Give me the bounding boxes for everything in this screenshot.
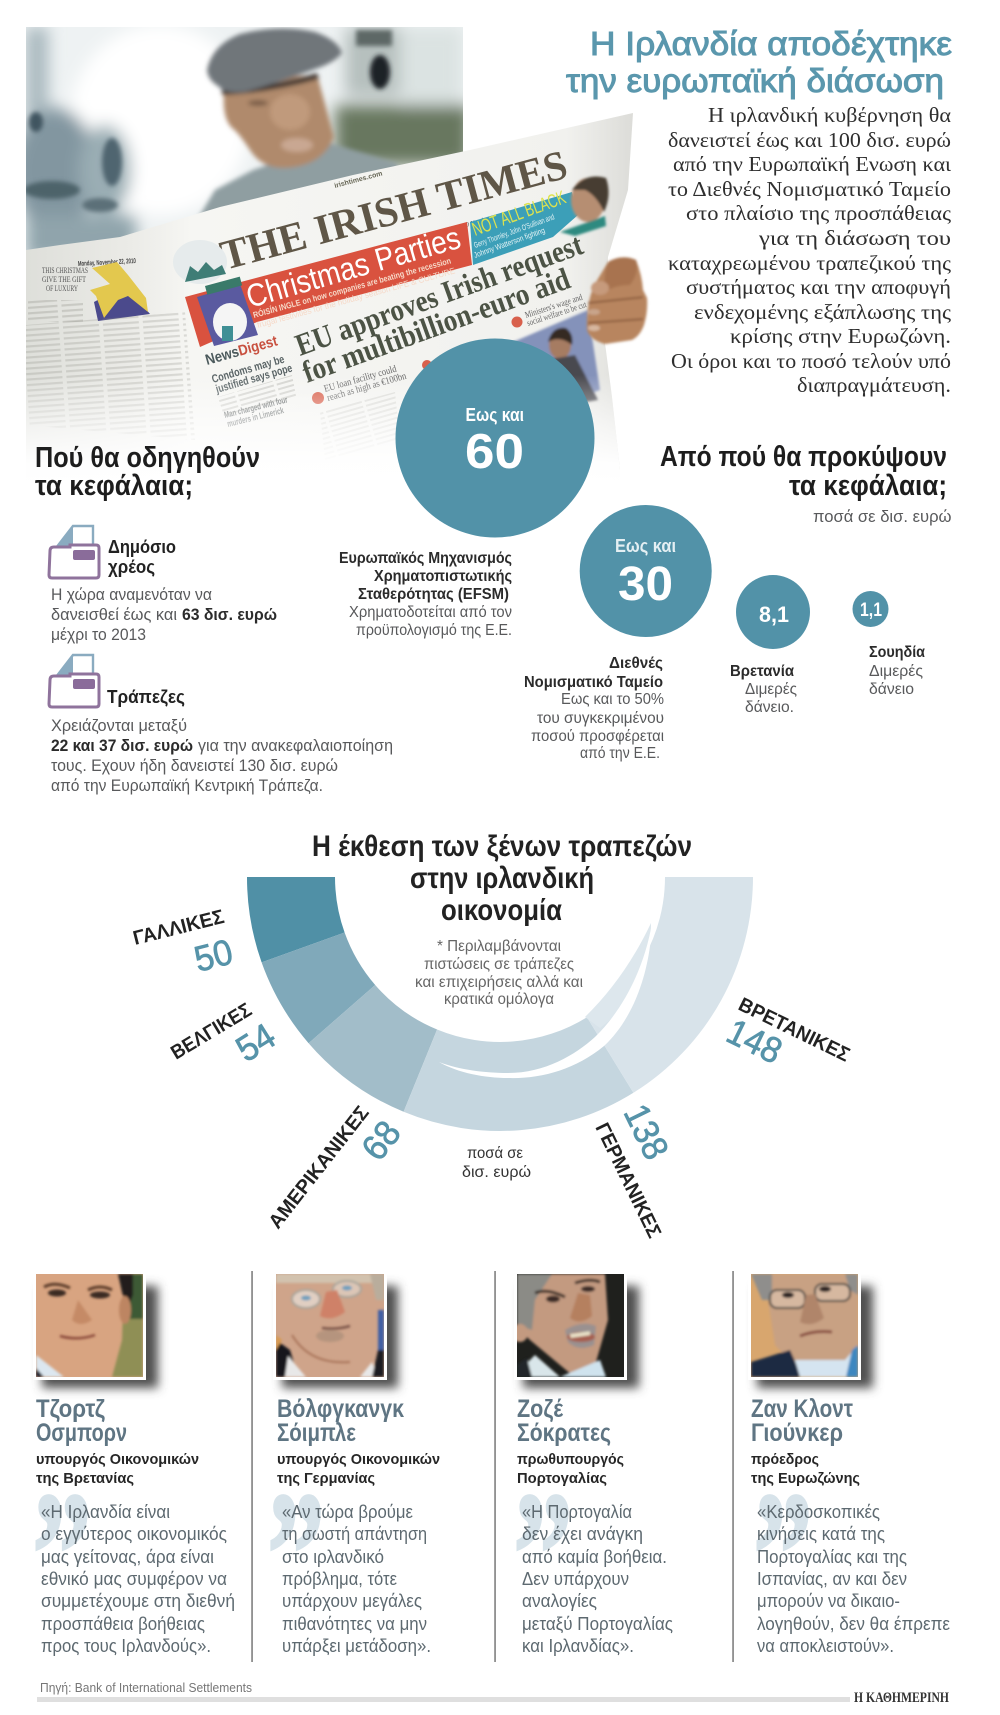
intro text block: το Διεθνές Νομισματικό Ταμείο	[668, 177, 951, 201]
newspaper lead bullets: social welfare to be cut	[526, 299, 588, 328]
newspaper red banner	[185, 219, 472, 347]
quote: Sócrates: Δεν υπάρχουν	[522, 1569, 629, 1589]
quote: Juncker: Ισπανίας, αν και δεν	[757, 1569, 907, 1589]
text: EFSM: Ευρωπαϊκός Μηχανισμός	[339, 550, 512, 567]
chart note: * Περιλαμβάνονται	[437, 938, 561, 955]
quote: Schäuble: τη σωστή απάντηση	[282, 1524, 427, 1544]
chart unit note: ποσά σε	[467, 1145, 523, 1162]
bubble: 8.1	[736, 575, 810, 649]
heading: where will the funds come from	[660, 441, 952, 526]
newspaper snow globe	[173, 240, 227, 284]
label: German banks: ΓΕΡΜΑΝΙΚΕΣ	[591, 1120, 665, 1242]
label: American banks: 68	[353, 1113, 409, 1168]
chart note	[415, 938, 583, 1008]
name: Sócrates: Σόκρατες	[517, 1419, 611, 1447]
newspaper news digest: murders in Limerick	[226, 405, 285, 429]
newspaper player photo	[560, 176, 609, 236]
role: Osborne	[36, 1451, 199, 1487]
text: Britain: δάνειο.	[745, 699, 794, 716]
newspaper news digest	[204, 333, 296, 429]
bubble: up to 60: 60	[465, 425, 524, 479]
quote: Osborne: μας γείτονας, άρα είναι	[41, 1547, 214, 1567]
segment: Belgian banks 54	[262, 932, 375, 1043]
newspaper: Monday, November 22, 2010 €1.80 (incl. VAT) £1.20 Northern Ireland	[334, 209, 515, 264]
text: IMF: Εως και το 50%	[561, 691, 664, 708]
quote: Osborne: προσπάθεια βοήθειας	[41, 1614, 205, 1634]
quote: Osborne	[41, 1502, 235, 1656]
icon: folder, banks	[49, 655, 99, 707]
intro text block: ενδεχομένης εξάπλωσης της	[694, 300, 952, 324]
newspaper lead bullets: EU loan facility could	[323, 364, 398, 395]
text: banks	[51, 687, 393, 795]
bubble: 1.1: 1,1	[860, 600, 882, 621]
chart note: κρατικά ομόλογα	[444, 991, 554, 1008]
name: Osborne: Οσμπορν	[36, 1419, 127, 1447]
white swoosh	[439, 923, 652, 1078]
quote: Juncker: «Κερδοσκοπικές	[757, 1502, 880, 1522]
newspaper	[26, 113, 633, 468]
portrait: Schäuble	[273, 1271, 398, 1388]
chart title: οικονομία	[441, 894, 562, 927]
quote: Sócrates: μεταξύ Πορτογαλίας	[522, 1614, 673, 1634]
quote: Juncker	[757, 1502, 950, 1656]
role: Schäuble: υπουργός Οικονομικών	[277, 1451, 440, 1468]
label: Belgian banks: 54	[229, 1015, 282, 1070]
quote: Juncker: λογηθούν, δεν θα έπρεπε	[757, 1614, 950, 1634]
text: banks: 22 και 37 δισ. ευρώ	[51, 736, 193, 755]
quote: Sócrates	[522, 1502, 673, 1656]
intro text block: Οι όροι και το ποσό τελούν υπό	[671, 349, 951, 373]
text: Britain	[730, 663, 797, 716]
intro text block: διαπραγμάτευση.	[797, 373, 951, 397]
icon: quote mark: ”	[753, 1455, 813, 1653]
newspaper lead bullets: reach as high as €100bn	[326, 371, 408, 404]
text: IMF: από την Ε.Ε.	[580, 745, 660, 762]
quote: Sócrates: από καμία βοήθεια.	[522, 1547, 667, 1567]
quote: Osborne: συμμετέχουμε στη διεθνή	[41, 1591, 235, 1611]
role: Juncker: πρόεδρος	[751, 1451, 819, 1468]
quote: Schäuble: υπάρχουν μεγάλες	[282, 1591, 422, 1611]
text: public debt: μέχρι το 2013	[51, 625, 146, 644]
person: José Sócrates	[512, 1271, 673, 1656]
newspaper lead bullets	[312, 294, 587, 431]
newspaper news digest: justified says pope	[214, 363, 294, 396]
segment: British banks 148	[587, 877, 753, 1093]
quote: Schäuble: πρόβλημα, τότε	[282, 1569, 397, 1589]
title: Η Ιρλανδία αποδέχτηκε	[590, 25, 952, 62]
role: Sócrates	[517, 1451, 624, 1487]
photo: man reading The Irish Times	[26, 27, 649, 468]
chart unit note	[462, 1145, 531, 1181]
heading: where will the funds go: Πού θα οδηγηθούν	[35, 442, 260, 474]
text: IMF: Διεθνές	[609, 655, 663, 672]
intro text block: Η ιρλανδική κυβέρνηση θα	[708, 103, 951, 127]
text: IMF: Νομισματικό Ταμείο	[524, 674, 663, 691]
newspaper lead bullets: Ministers's wage and	[524, 292, 584, 320]
name: Sócrates: Ζοζέ	[517, 1395, 564, 1423]
quote: Osborne: ο εγγύτερος οικονομικός	[41, 1524, 227, 1544]
newspaper red banner: RÓISÍN INGLE on how companies are beating the recession	[252, 255, 452, 320]
newspaper: for multibillion-euro aid	[297, 261, 575, 390]
text: IMF	[524, 655, 664, 762]
newspaper left page	[26, 258, 195, 440]
role: Schäuble	[277, 1451, 440, 1487]
text: banks: για την ανακεφαλαιοποίηση	[198, 736, 393, 755]
role: Juncker	[751, 1451, 860, 1487]
newspaper red banner: Christmas Parties	[242, 219, 464, 315]
heading: where will the funds go: τα κεφάλαια;	[35, 470, 193, 502]
text: Sweden: δάνειο	[869, 681, 914, 698]
intro text block: καταχρεωμένου τραπεζικού της	[668, 251, 952, 275]
text: Sweden	[869, 644, 925, 698]
icon: quote mark: ”	[267, 1455, 325, 1653]
text: public debt: 63 δισ. ευρώ	[182, 605, 277, 624]
text: Sweden: Διμερές	[869, 663, 923, 680]
chart unit note: δισ. ευρώ	[462, 1164, 531, 1181]
segment: French banks 50	[247, 877, 345, 962]
icon: quote mark: ”	[513, 1455, 573, 1653]
quote: Juncker: να αποκλειστούν».	[757, 1636, 894, 1656]
role: Juncker: της Ευρωζώνης	[751, 1470, 860, 1487]
quote: Schäuble: «Αν τώρα βρούμε	[282, 1502, 413, 1522]
text: EFSM	[339, 550, 512, 639]
quote: Juncker: κινήσεις κατά της	[757, 1524, 885, 1544]
crescent highlight	[585, 923, 651, 1028]
text: public debt: Η χώρα αναμενόταν να	[51, 585, 212, 604]
name: Schäuble: Σόιμπλε	[277, 1419, 356, 1447]
name: Juncker: Γιούνκερ	[751, 1419, 843, 1447]
newspaper blue box	[470, 187, 578, 265]
quote: Juncker: μπορούν να δικαιο-	[757, 1591, 900, 1611]
heading: where will the funds come from: τα κεφάλαια;	[789, 470, 947, 502]
icon: folder, public debt	[49, 526, 99, 578]
name: Juncker: Ζαν Κλοντ	[751, 1395, 853, 1423]
role: Osborne: της Βρετανίας	[36, 1470, 134, 1487]
quote: Sócrates: δεν έχει ανάγκη	[522, 1524, 643, 1544]
photo background: blurred trees and sky	[26, 27, 463, 250]
segment: American banks 68	[309, 985, 437, 1112]
text: banks: Χρειάζονται μεταξύ	[51, 716, 187, 735]
intro text block: στο πλαίσιο της προσπάθειας	[686, 201, 952, 225]
text: public debt: Δημόσιο	[108, 537, 176, 557]
newspaper left page: Monday, November 22, 2010	[78, 258, 136, 268]
portrait: Juncker	[748, 1271, 873, 1388]
bubble: up to 60: Εως και	[466, 405, 524, 425]
bubble: 8.1: 8,1	[759, 602, 789, 627]
newspaper red banner: frugal festivities for the holiday season LIFE & CULTURE	[256, 265, 456, 330]
chart title	[312, 830, 692, 927]
label: Belgian banks: ΒΕΛΓΙΚΕΣ	[167, 999, 256, 1064]
label: British banks: 148	[720, 1010, 789, 1072]
newspaper news digest: NewsDigest	[204, 333, 279, 369]
role: Sócrates: Πορτογαλίας	[517, 1470, 607, 1487]
quote: Schäuble: πιθανότητες να μην	[282, 1614, 427, 1634]
person: George Osborne	[32, 1271, 235, 1656]
chart: semi-donut of foreign bank exposure	[247, 877, 753, 1131]
intro text block: δανειστεί έως και 100 δισ. ευρώ	[668, 128, 951, 152]
newspaper left page: THIS CHRISTMAS	[42, 266, 88, 275]
chart title: Η έκθεση των ξένων τραπεζών	[312, 830, 692, 863]
quote: Osborne: εθνικό μας συμφέρον να	[41, 1569, 227, 1589]
intro text block: για τη διάσωση του	[758, 226, 951, 250]
name: Juncker	[751, 1395, 853, 1447]
label: German banks: 138	[616, 1098, 677, 1166]
label: American banks: ΑΜΕΡΙΚΑΝΙΚΕΣ	[265, 1102, 374, 1233]
text: banks: από την Ευρωπαϊκή Κεντρική Τράπεζα.	[51, 776, 323, 795]
text: banks: τους. Εχουν ήδη δανειστεί 130 δισ. ευρώ	[51, 756, 338, 775]
intro text block: από την Ευρωπαϊκή Ενωση και	[673, 152, 951, 176]
newspaper snowman drawing	[197, 277, 258, 346]
intro text block	[668, 103, 952, 397]
label: French banks: 50	[190, 931, 237, 980]
portrait: Sócrates	[512, 1271, 639, 1388]
quote: Juncker: Πορτογαλίας και της	[757, 1547, 907, 1567]
newspaper left page: OF LUXURY	[46, 284, 78, 293]
intro text block: συστήματος και την αποφυγή	[686, 275, 951, 299]
role: Sócrates: πρωθυπουργός	[517, 1451, 624, 1468]
bubble: up to 30: 30	[618, 558, 673, 611]
text: Britain: Βρετανία	[730, 663, 794, 680]
source line: Πηγή: Bank of International Settlements	[40, 1680, 252, 1695]
title	[566, 25, 952, 99]
title: την ευρωπαϊκή διάσωση	[566, 62, 944, 99]
label: British banks: ΒΡΕΤΑΝΙΚΕΣ	[735, 994, 853, 1067]
newspaper left page: GIVE THE GIFT	[42, 275, 86, 284]
logo: Kathimerini: Η ΚΑΘΗΜΕΡΙΝΗ	[854, 1690, 949, 1706]
person: Wolfgang Schäuble	[267, 1271, 440, 1656]
role: Osborne: υπουργός Οικονομικών	[36, 1451, 199, 1468]
text: IMF: του συγκεκριμένου	[537, 710, 664, 727]
text: Britain: Διμερές	[745, 681, 797, 698]
portrait: Osborne	[33, 1271, 158, 1388]
quote: Schäuble: υπάρξει μετάδοση».	[282, 1636, 431, 1656]
newspaper news digest: Man charged with four	[223, 394, 289, 420]
text: public debt	[51, 537, 277, 644]
quote: Osborne: «Η Ιρλανδία είναι	[41, 1502, 170, 1522]
name: Osborne	[36, 1395, 127, 1447]
quote: Sócrates: «Η Πορτογαλία	[522, 1502, 632, 1522]
text: EFSM: Σταθερότητας (EFSM)	[358, 586, 509, 603]
chart note: πιστώσεις σε τράπεζες	[424, 956, 574, 973]
heading: where will the funds go	[35, 442, 260, 502]
text: IMF: ποσού προσφέρεται	[531, 728, 664, 745]
person: Jean-Claude Juncker	[748, 1271, 950, 1656]
name: Osborne: Τζορτζ	[36, 1395, 105, 1423]
quote: Schäuble	[282, 1502, 431, 1656]
text: EFSM: προϋπολογισμό της Ε.Ε.	[356, 622, 512, 639]
hand holding newspaper	[587, 257, 647, 344]
intro text block: κρίσης στην Ευρωζώνη.	[730, 324, 951, 348]
newspaper: irishtimes.com	[334, 170, 383, 190]
role: Schäuble: της Γερμανίας	[277, 1470, 375, 1487]
quote: Sócrates: και Ιρλανδίας».	[522, 1636, 634, 1656]
name: Schäuble: Βόλφγκανγκ	[277, 1395, 404, 1423]
text: Sweden: Σουηδία	[869, 644, 925, 661]
label: French banks: ΓΑΛΛΙΚΕΣ	[131, 906, 226, 950]
newspaper blue box: Gerry Thornley, John O'Sullivan and	[473, 212, 556, 250]
heading: where will the funds come from: ποσά σε δισ. ευρώ	[813, 507, 952, 526]
bubble: up to 30	[580, 505, 712, 637]
bubble: 1.1	[852, 591, 888, 627]
text: banks: Τράπεζες	[107, 687, 185, 708]
newspaper masthead: THE IRISH TIMES	[216, 142, 572, 280]
text: EFSM: Χρηματοδοτείται από τον	[349, 604, 512, 621]
label: French banks	[131, 906, 237, 980]
text: public debt: χρέος	[108, 557, 155, 577]
chart note: και επιχειρήσεις αλλά και	[415, 974, 583, 991]
quote: Sócrates: αναλογίες	[522, 1591, 597, 1611]
newspaper blue box: Johnny Watterson fighting	[473, 226, 546, 260]
quote: Schäuble: στο ιρλανδικό	[282, 1547, 384, 1567]
newspaper headline: EU approves Irish request	[290, 226, 588, 363]
newspaper inset photo	[514, 309, 602, 404]
text: EFSM: Χρηματοπιστωτικής	[374, 568, 512, 585]
bubble: up to 60	[396, 338, 594, 538]
name: Schäuble	[277, 1395, 404, 1447]
quote: Osborne: προς τους Ιρλανδούς».	[41, 1636, 211, 1656]
heading: where will the funds come from: Από πού θα προκύψουν	[660, 441, 947, 473]
newspaper news digest: Condoms may be	[211, 354, 286, 386]
segment: German banks 138	[404, 1017, 633, 1131]
bubble: up to 30: Εως και	[615, 536, 676, 556]
name: Sócrates	[517, 1395, 611, 1447]
chart title: στην ιρλανδική	[410, 862, 594, 895]
text: public debt: δανεισθεί έως και	[51, 605, 177, 624]
icon: quote mark: ”	[32, 1455, 92, 1653]
newspaper blue box: NOT ALL BLACK	[470, 187, 569, 241]
